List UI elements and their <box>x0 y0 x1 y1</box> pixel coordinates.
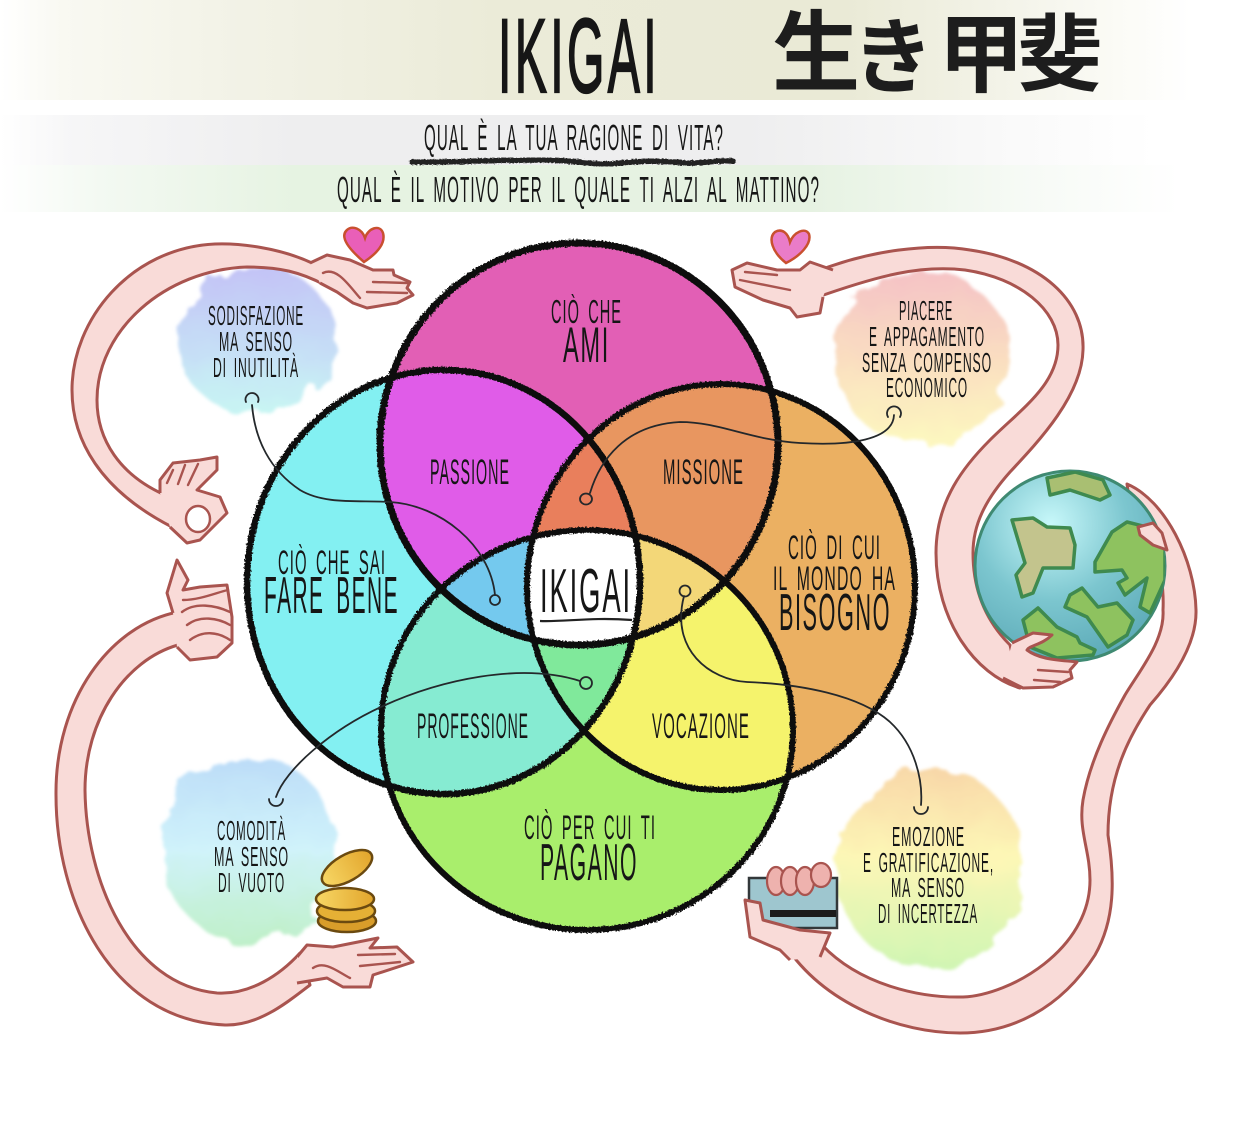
callout text: comodità <box>214 815 289 898</box>
callout text: piacere: PIACERE <box>899 295 953 326</box>
icon: thumbs up hand <box>167 560 232 660</box>
text: PAGANO <box>540 834 638 892</box>
venn label: ciò che sai fare bene <box>264 544 399 625</box>
circle fill: ciò che ami <box>380 243 778 645</box>
header banner <box>0 0 1242 115</box>
circle fill: ciò che sai fare bene <box>247 370 640 794</box>
subtitle band: first question: QUAL È LA TUA RAGIONE DI VITA? <box>424 117 724 158</box>
text: FARE BENE <box>264 567 399 625</box>
overlap: missione <box>594 386 775 578</box>
text: DI INUTILITÀ <box>213 352 299 383</box>
icon: open hand <box>310 255 413 308</box>
venn label: ciò che ami: AMI <box>563 317 610 373</box>
icon: heart right <box>772 231 809 263</box>
text: MISSIONE <box>663 453 744 492</box>
connector: comodità to bottom overlap <box>269 673 592 806</box>
venn label: ciò per cui ti pagano <box>524 809 656 892</box>
text: E APPAGAMENTO <box>869 321 985 352</box>
connector: piacere to top overlap <box>580 406 901 504</box>
callout text: emozione: EMOZIONE <box>892 821 965 852</box>
icon: hand holding card <box>745 863 837 960</box>
icon: hand holding globe bottom <box>1003 633 1077 688</box>
icon: globe <box>975 471 1165 661</box>
text: PASSIONE <box>430 453 510 492</box>
brush underline <box>412 160 733 164</box>
callout text: emozione: MA SENSO <box>891 872 965 903</box>
overlap: professione <box>383 594 580 792</box>
circle outlines <box>247 243 915 930</box>
triple overlap: bottom <box>538 642 629 727</box>
arm: right lower with card hand, hugging globe <box>785 484 1196 1033</box>
overlap: passione <box>382 372 584 584</box>
center: ikigai white <box>529 532 638 642</box>
text: CIÒ CHE <box>551 293 622 330</box>
arm: top left with open hand and ok hand <box>72 244 413 543</box>
callout text: sodisfazione: MA SENSO <box>219 326 293 357</box>
arm: right upper with open hand <box>815 247 1083 688</box>
text: CIÒ CHE SAI <box>278 544 386 582</box>
triple overlap: top <box>537 444 632 533</box>
text: VOCAZIONE <box>652 707 750 746</box>
circle fill: ciò per cui ti pagano <box>381 530 793 930</box>
connector: emozione to right overlap <box>680 586 928 814</box>
circle fill: ciò di cui il mondo ha bisogno <box>527 384 915 790</box>
watercolor blob: top right <box>835 272 1010 444</box>
text: DI INCERTEZZA <box>878 898 978 929</box>
watercolor blob: top left <box>178 268 335 414</box>
overlap: vocazione <box>588 584 791 788</box>
icon: heart left <box>344 228 384 262</box>
text: DI VUOTO <box>218 867 285 898</box>
text: MA SENSO <box>214 841 289 872</box>
text: IL MONDO HA <box>773 560 896 598</box>
venn label: ciò che ami <box>551 293 622 373</box>
icon: coins <box>316 843 378 932</box>
title: kanji <box>772 0 1102 110</box>
icon: fingers on globe top right <box>1138 523 1167 550</box>
triple overlap: left <box>446 540 530 636</box>
watercolor blob: bottom left <box>162 757 335 943</box>
icon: ok hand <box>160 457 227 543</box>
center label: ikigai <box>540 557 632 626</box>
icon: open hand with coins <box>297 938 413 987</box>
text: IKIGAI <box>540 557 632 626</box>
venn label: ciò di cui il mondo ha bisogno: CIÒ DI CUI <box>788 529 881 567</box>
text: BISOGNO <box>779 584 891 642</box>
text: PROFESSIONE <box>417 707 529 746</box>
triple overlap: right <box>637 540 720 633</box>
watercolor blob: bottom right <box>837 769 1023 968</box>
text: SODISFAZIONE <box>208 300 304 331</box>
text: CIÒ PER CUI TI <box>524 809 656 847</box>
callout text: sodisfazione <box>208 300 304 383</box>
icon: open hand top right <box>732 262 833 317</box>
arm: bottom left with thumb up and coin hand <box>56 560 413 1025</box>
text: E GRATIFICAZIONE, <box>863 847 994 878</box>
venn diagram <box>243 238 918 934</box>
subtitle band: second question <box>0 165 1242 212</box>
header banner: IKIGAI <box>498 0 660 115</box>
text: SENZA COMPENSO <box>862 347 992 378</box>
venn label: ciò di cui il mondo ha bisogno <box>773 529 896 642</box>
text: COMODITÀ <box>217 815 286 846</box>
connector: sodisfazione to left overlap <box>246 393 500 605</box>
subtitle band: first question <box>0 115 1242 165</box>
callout text: emozione <box>863 821 994 929</box>
callout text: piacere: ECONOMICO <box>886 372 968 403</box>
callout text: piacere <box>862 295 992 403</box>
